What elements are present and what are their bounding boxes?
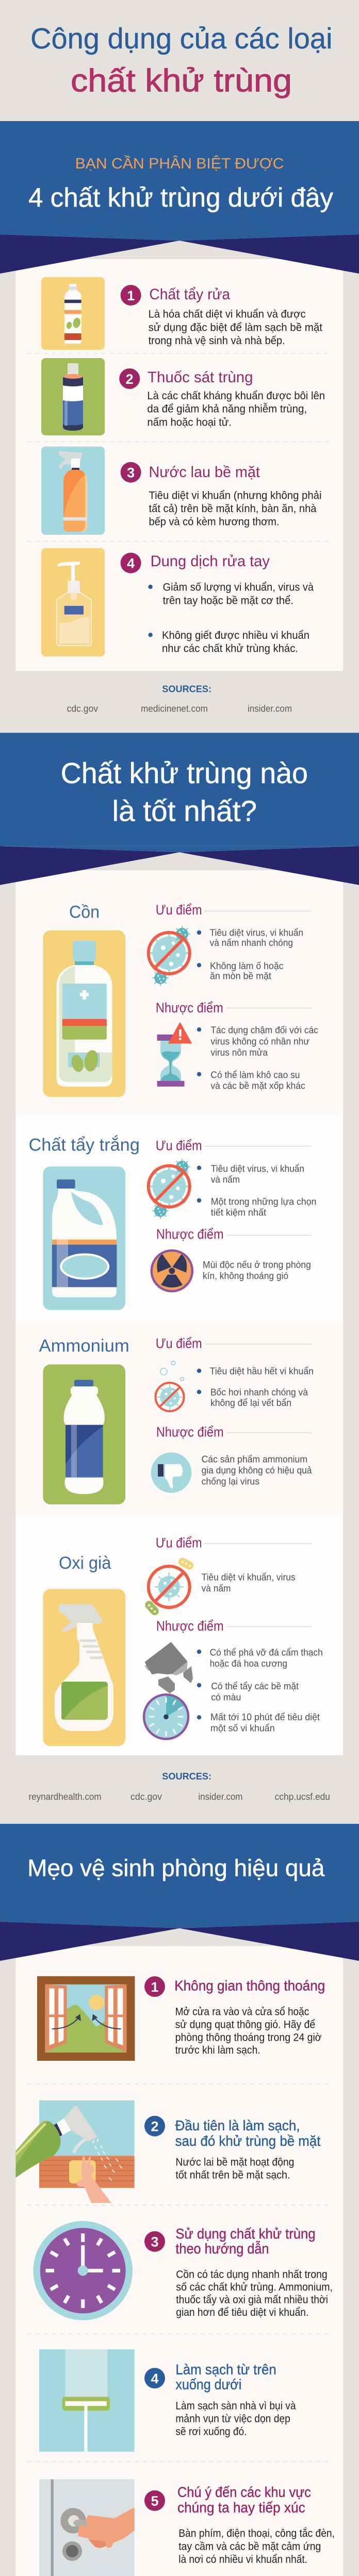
sources block 1: cdc.gov <box>67 704 98 714</box>
tip 4: top to bottom: 4 <box>151 2371 159 2386</box>
icon: bubbles and crossed virus <box>156 1361 184 1411</box>
item 3: surface wipe <box>121 462 322 528</box>
item 4: hand sanitizer: trên tay hoặc bề mặt cơ thể. <box>163 595 293 606</box>
heading: bleach: Chất tẩy trắng <box>29 1135 140 1155</box>
panel: disinfectant comparison background <box>15 870 343 1755</box>
pros text: alcohol: Tiêu diệt virus, vi khuẩn <box>210 928 303 938</box>
banner: cleaning tips: Mẹo vệ sinh phòng hiệu quả <box>27 1855 325 1882</box>
cons text: alcohol: virus nôn mửa <box>210 1047 268 1058</box>
tip 3: follow instructions <box>144 2226 333 2318</box>
cons label: hydrogen peroxide: Nhược điểm <box>156 1618 224 1634</box>
item 1: cleaner: trong nhà vệ sinh và nhà bếp. <box>149 335 285 347</box>
item 3: surface wipe: 3 <box>127 465 135 481</box>
tip 1: ventilation <box>144 1976 325 2056</box>
cons text: bleach: kín, không thoáng gió <box>203 1270 288 1281</box>
icon: virus crossed out <box>148 926 191 986</box>
pros label: bleach: Ưu điểm <box>156 1138 202 1154</box>
item 2: antiseptic: da để giảm khả năng nhiễm trùng, <box>147 403 307 415</box>
tip 2: clean then disinfect: sau đó khử trùng bề mặt <box>175 2133 321 2149</box>
icon: crossed virus with bacteria <box>143 1556 195 1617</box>
cons text: alcohol: Tác dụng chậm đối với các <box>210 1025 318 1036</box>
sources block 1: medicinenet.com <box>141 704 208 714</box>
tip 5: high-touch areas: 5 <box>151 2494 159 2509</box>
cons text: ammonium: gia dụng không có hiệu quả <box>202 1465 312 1476</box>
icon: hourglass with warning <box>157 1023 191 1087</box>
cons text: hydrogen peroxide: Có thể tẩy các bề mặt <box>211 1681 299 1691</box>
sources block 1 <box>67 684 292 714</box>
tip 2: clean then disinfect: tốt nhất trên bề mặt sạch. <box>175 2169 290 2181</box>
cons label: alcohol: Nhược điểm <box>156 1000 223 1015</box>
icon: antiseptic bottle on green <box>41 358 105 435</box>
cons text: hydrogen peroxide: Có thể phá vỡ đá cẩm thạch <box>210 1647 323 1657</box>
cons text: hydrogen peroxide: hoặc đá hoa cương <box>210 1658 287 1669</box>
icon: ten minute clock <box>144 1694 188 1739</box>
item 1: cleaner: 1 <box>127 288 135 303</box>
item 4: hand sanitizer: 4 <box>127 556 135 571</box>
item 3: surface wipe: Tiêu diệt vi khuẩn (nhưng không phải <box>149 489 322 501</box>
sources block 1: SOURCES: <box>162 684 211 694</box>
cons text: hydrogen peroxide: có màu <box>211 1692 241 1703</box>
item 1: cleaner: sử dụng đặc biệt để làm sạch bề mặt <box>149 321 322 333</box>
cons text: bleach: Mùi độc nếu ở trong phòng <box>203 1260 311 1270</box>
item 1: cleaner: Chất tẩy rửa <box>149 286 230 303</box>
item 3: surface wipe: bếp và có kèm hương thơm. <box>149 516 280 528</box>
banner: four disinfectants <box>0 121 359 274</box>
item 4: hand sanitizer <box>121 553 314 655</box>
heading: hydrogen peroxide: Oxi già <box>59 1553 111 1573</box>
cons text: alcohol: và các bề mặt xốp khác <box>210 1080 305 1091</box>
icon: hydrogen peroxide spray bottle <box>43 1589 125 1746</box>
pros text: bleach: và nấm <box>211 1175 240 1185</box>
panel: disinfectant types card <box>15 259 343 671</box>
tip 4: top to bottom: sẽ rơi xuống đó. <box>175 2426 247 2438</box>
icon: floor mop <box>39 2349 135 2452</box>
icon: surface spray on aqua <box>41 447 105 535</box>
tip 5: high-touch areas: tay cầm và các bề mặt cảm ứng <box>178 2540 321 2552</box>
tip 3: follow instructions: 3 <box>151 2234 159 2250</box>
icon: hand sanitizer pump on yellow <box>41 548 105 656</box>
heading: alcohol: Cồn <box>69 903 100 922</box>
icon: broken stone <box>144 1642 193 1693</box>
item 4: hand sanitizer: Không giết được nhiều vi khuẩn <box>162 630 309 641</box>
pros text: alcohol <box>197 928 303 981</box>
cons label: bleach: Nhược điểm <box>156 1226 224 1242</box>
banner: which disinfectant is best <box>0 733 359 885</box>
sources block 2: reynardhealth.com <box>29 1791 102 1802</box>
tip 5: high-touch areas: là nơi có nhiều vi khuẩn nhất. <box>178 2553 307 2565</box>
item 4: hand sanitizer: Giảm số lượng vi khuẩn, virus và <box>163 582 314 594</box>
title <box>30 22 332 99</box>
item 3: surface wipe: tất cả) trên bề mặt kính, bàn ăn, nhà <box>149 503 317 515</box>
tip 1: ventilation: Mở cửa ra vào và cửa sổ hoặc <box>175 2006 309 2018</box>
pros label: hydrogen peroxide: Ưu điểm <box>156 1535 202 1550</box>
sources block 2 <box>29 1771 330 1802</box>
tip 4: top to bottom: xuống dưới <box>175 2377 241 2393</box>
icon: open window <box>37 1976 135 2061</box>
tip 5: high-touch areas: chúng ta hay tiếp xúc <box>177 2500 305 2516</box>
sources block 2: cchp.ucsf.edu <box>275 1791 330 1802</box>
pros text: bleach: Tiêu diệt virus, vi khuẩn <box>211 1163 304 1174</box>
cons text: bleach <box>203 1260 311 1281</box>
tip 2: clean then disinfect: 2 <box>151 2119 159 2134</box>
banner: four disinfectants: BẠN CẦN PHÂN BIỆT ĐƯỢC <box>75 155 284 172</box>
pros label: alcohol: Ưu điểm <box>156 902 202 918</box>
icon: alcohol bottle <box>43 930 125 1097</box>
pros text: hydrogen peroxide <box>202 1572 296 1594</box>
heading: ammonium: Ammonium <box>39 1336 129 1355</box>
pros text: hydrogen peroxide: và nấm <box>202 1583 231 1594</box>
item 2: antiseptic <box>119 368 325 429</box>
tip 3: follow instructions: thuốc tẩy và oxi già mất nhiều thời <box>176 2294 328 2306</box>
title: Công dụng của các loại <box>30 22 332 55</box>
tip 3: follow instructions: Cồn có tác dụng nhanh nhất trong <box>176 2269 328 2281</box>
pros text: ammonium: không để lại vết bẩn <box>210 1398 291 1408</box>
icon: hand on door handle <box>39 2479 135 2576</box>
tip 2: clean then disinfect <box>144 2116 321 2181</box>
cons text: hydrogen peroxide <box>197 1647 323 1734</box>
cons text: alcohol: Có thể làm khô cao su <box>210 1070 300 1080</box>
tip 1: ventilation: phòng thông thoáng trong 24 giờ <box>175 2031 322 2043</box>
item 1: cleaner <box>121 285 322 347</box>
tip 3: follow instructions: theo hướng dẫn <box>175 2241 269 2257</box>
tip 1: ventilation: Không gian thông thoáng <box>174 1977 325 1993</box>
pros text: hydrogen peroxide: Tiêu diệt vi khuẩn, virus <box>202 1572 296 1583</box>
tip 3: follow instructions: số các chất khử trùng. Ammonium, <box>176 2281 333 2293</box>
tip 4: top to bottom: Làm sạch từ trên <box>175 2361 276 2377</box>
icon: bleach jug <box>43 1166 125 1310</box>
cons text: ammonium <box>202 1454 312 1487</box>
banner: which disinfectant is best: Chất khử trùng nào <box>61 757 308 790</box>
cons label: ammonium: Nhược điểm <box>156 1424 224 1439</box>
tip 5: high-touch areas: Chú ý đến các khu vực <box>177 2484 311 2500</box>
pros text: bleach: Một trong những lựa chọn <box>211 1196 316 1207</box>
icon: spray and wipe surface <box>15 2100 135 2203</box>
sources block 2: insider.com <box>198 1791 242 1802</box>
pros text: bleach: tiết kiệm nhất <box>211 1207 266 1217</box>
tip 5: high-touch areas: Bàn phím, điện thoại, công tắc đèn, <box>178 2528 335 2539</box>
banner: four disinfectants: 4 chất khử trùng dưới đây <box>28 183 333 213</box>
cons text: ammonium: Các sản phẩm ammonium <box>202 1454 307 1464</box>
cons text: ammonium: chống lại virus <box>202 1477 259 1487</box>
banner: cleaning tips <box>0 1824 359 1961</box>
item 2: antiseptic: Thuốc sát trùng <box>148 369 253 386</box>
banner: which disinfectant is best: là tốt nhất? <box>112 794 257 827</box>
cons text: hydrogen peroxide: một số vi khuẩn <box>210 1723 275 1734</box>
item 2: antiseptic: Là các chất kháng khuẩn được bôi lên <box>147 390 325 402</box>
tip 4: top to bottom: mảnh vụn từ việc dọn dẹp <box>175 2413 290 2425</box>
title: chất khử trùng <box>71 63 292 99</box>
sources block 2: SOURCES: <box>162 1771 211 1782</box>
pros text: ammonium <box>197 1366 314 1408</box>
pros label: ammonium: Ưu điểm <box>156 1336 202 1351</box>
icon: virus crossed out (bleach) <box>148 1159 191 1218</box>
pros text: bleach <box>197 1163 316 1217</box>
icon: large clock <box>33 2221 133 2320</box>
tip 3: follow instructions: Sử dụng chất khử trùng <box>175 2226 316 2242</box>
item 1: cleaner: Là hóa chất diệt vi khuẩn và được <box>149 309 306 320</box>
tip 4: top to bottom: Làm sạch sàn nhà vì bụi và <box>175 2400 296 2412</box>
panel: cleaning tips card <box>15 1946 343 2576</box>
item 3: surface wipe: Nước lau bề mặt <box>149 464 260 481</box>
cons text: alcohol <box>197 1025 318 1091</box>
pros text: alcohol: ăn mòn bề mặt <box>210 971 271 981</box>
item 4: hand sanitizer: Dung dịch rửa tay <box>151 553 270 570</box>
tip 1: ventilation: 1 <box>151 1979 159 1995</box>
cons text: alcohol: virus không có nhân như <box>210 1036 309 1046</box>
icon: thumbs down <box>151 1452 191 1493</box>
sources block 2: cdc.gov <box>130 1791 162 1802</box>
tip 3: follow instructions: gian hơn để tiêu diệt vi khuẩn. <box>176 2307 308 2318</box>
cons text: hydrogen peroxide: Mất tới 10 phút để tiêu diệt <box>210 1712 320 1722</box>
icon: ammonium bottle <box>43 1364 125 1504</box>
sources block 1: insider.com <box>248 704 292 714</box>
pros text: alcohol: và nấm nhanh chóng <box>210 938 293 948</box>
icon: radiation hazard <box>152 1250 192 1291</box>
tip 1: ventilation: sử dụng quạt thông gió. Hãy để <box>175 2019 315 2031</box>
item 4: hand sanitizer: như các chất khử trùng khác. <box>162 643 298 655</box>
pros text: ammonium: Bốc hơi nhanh chóng và <box>210 1387 308 1397</box>
item 2: antiseptic: nấm hoặc hoại tử. <box>147 417 232 429</box>
tip 2: clean then disinfect: Đầu tiên là làm sạch, <box>175 2117 300 2133</box>
tip 5: high-touch areas <box>144 2484 335 2565</box>
pros text: ammonium: Tiêu diệt hầu hết vi khuẩn <box>210 1366 314 1377</box>
tip 2: clean then disinfect: Nước lai bề mặt hoạt động <box>175 2156 294 2168</box>
pros text: alcohol: Không làm ố hoặc <box>210 961 284 971</box>
tip 4: top to bottom <box>144 2361 296 2438</box>
item 2: antiseptic: 2 <box>126 371 134 387</box>
icon: cleaner bottle on yellow <box>41 277 105 350</box>
tip 1: ventilation: trước khi làm sạch. <box>175 2044 260 2056</box>
